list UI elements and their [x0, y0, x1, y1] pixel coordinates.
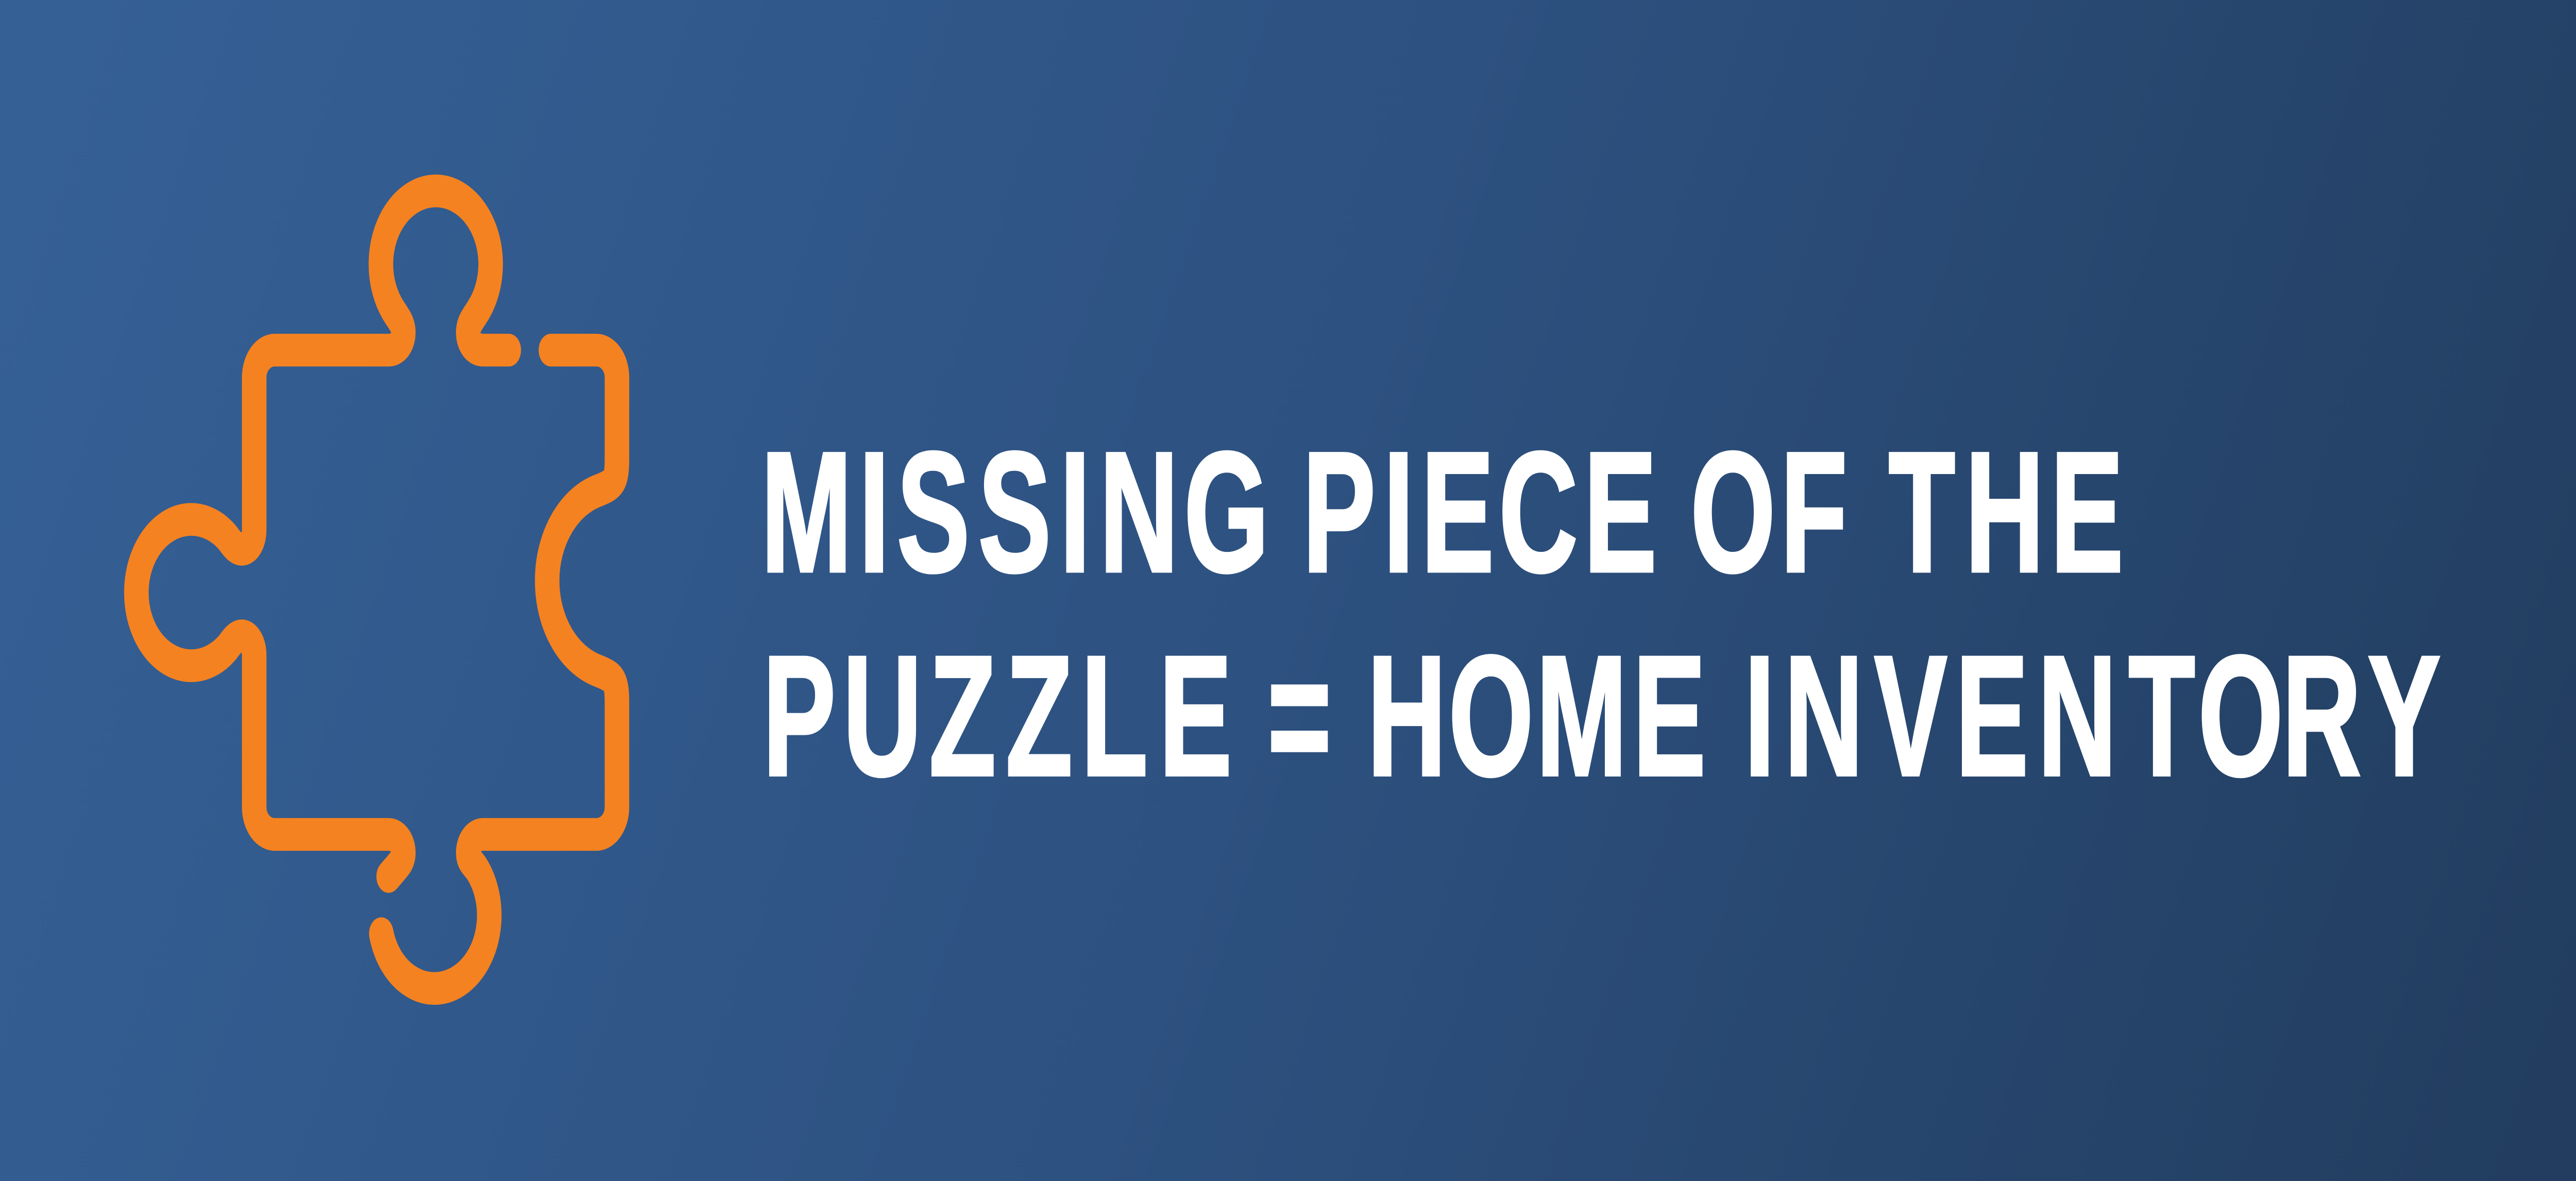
heading line 1: MISSING PIECE OF THE — [761, 416, 2123, 608]
heading — [761, 416, 2441, 811]
icon: orange puzzle piece outline — [137, 191, 617, 988]
heading line 2: PUZZLE = HOME INVENTORY — [763, 620, 2441, 811]
